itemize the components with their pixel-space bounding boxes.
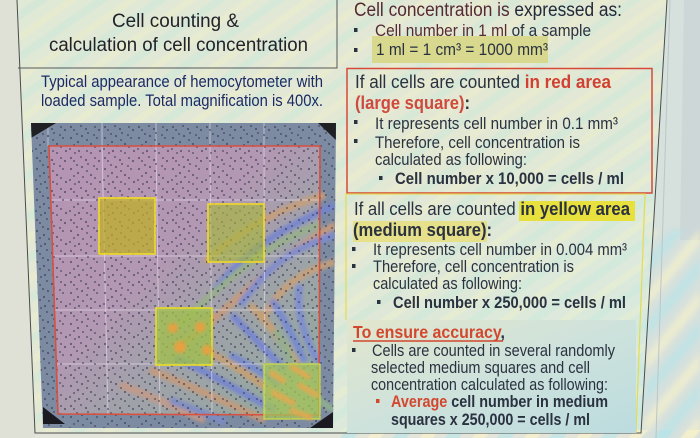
heading: medium square: (medium square): xyxy=(353,220,492,240)
heading: red area: If all cells are counted in red area xyxy=(355,72,612,92)
yellow medium square 2 xyxy=(208,204,264,262)
formula: average xyxy=(376,393,608,429)
hemocytometer micrograph xyxy=(25,118,340,433)
formula: yellow area: Cell number x 250,000 = cells / ml xyxy=(393,294,626,312)
yellow medium square 1 xyxy=(99,198,155,254)
bullets: Cell number in 1 ml of a sample xyxy=(375,21,591,40)
formula: red area: Cell number x 10,000 = cells / ml xyxy=(395,170,624,188)
formula: average: Average cell number in medium xyxy=(391,393,608,411)
heading: yellow area: If all cells are counted in yellow area xyxy=(354,199,631,219)
accuracy explanation xyxy=(352,341,615,394)
highlight: yellow area xyxy=(353,201,635,242)
panel: red area calculation xyxy=(347,68,652,193)
image caption: Typical appearance of hemocytometer with xyxy=(41,73,323,91)
yellow area explanation: calculated as following: xyxy=(373,274,522,293)
bullets xyxy=(354,21,591,63)
accuracy explanation: selected medium squares and cell xyxy=(371,358,590,377)
bullets: 1 ml = 1 cm³ = 1000 mm³ xyxy=(376,40,548,59)
yellow area explanation: Therefore, cell concentration is xyxy=(373,257,574,276)
yellow area explanation: It represents cell number in 0.004 mm³ xyxy=(373,240,627,259)
yellow medium square 4 xyxy=(264,364,320,419)
heading: to ensure accuracy: To ensure accuracy, xyxy=(353,322,505,342)
accuracy explanation: concentration calculated as following: xyxy=(371,375,608,394)
panel: ensuring accuracy xyxy=(347,320,636,433)
image caption: loaded sample. Total magnification is 400x. xyxy=(41,92,323,110)
red area explanation: It represents cell number in 0.1 mm³ xyxy=(375,114,618,133)
header box with title xyxy=(18,0,337,68)
panel: yellow area calculation xyxy=(346,194,645,433)
yellow area explanation xyxy=(352,240,627,293)
red area explanation xyxy=(354,114,618,169)
red area explanation: Therefore, cell concentration is xyxy=(375,133,580,152)
header box with title: calculation of cell concentration xyxy=(49,35,308,56)
heading: cell concentration: Cell concentration is expressed as: xyxy=(354,0,622,21)
image caption xyxy=(41,73,323,110)
yellow medium square 3 xyxy=(156,308,212,365)
header box with title: Cell counting & xyxy=(112,11,239,32)
formula: average: squares x 250,000 = cells / ml xyxy=(391,411,590,429)
accuracy explanation: Cells are counted in several randomly xyxy=(372,341,615,360)
panel: cell concentration definition xyxy=(354,0,622,63)
red area explanation: calculated as following: xyxy=(375,150,527,169)
red area: large square xyxy=(49,146,320,415)
heading: large square: (large square): xyxy=(355,93,470,113)
